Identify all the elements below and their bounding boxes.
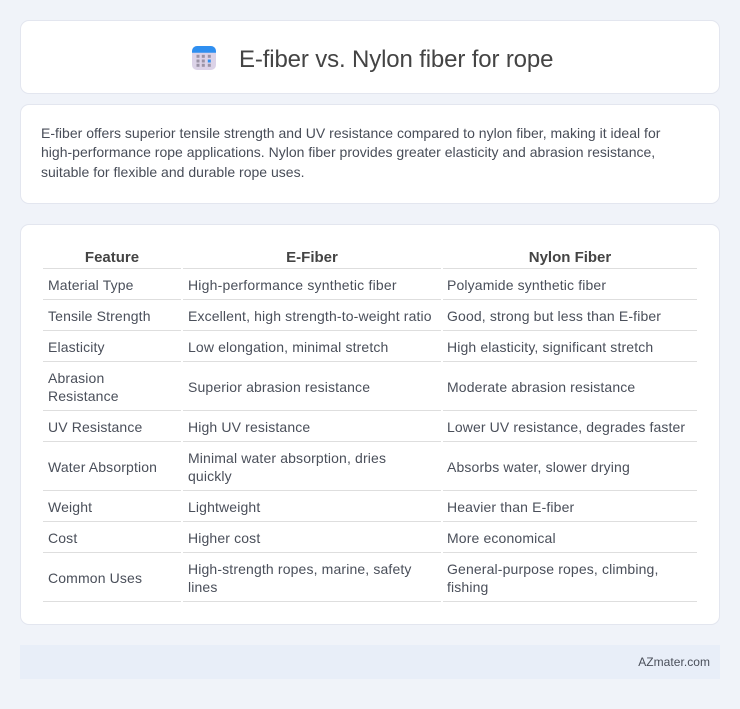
table rows: Moderate abrasion resistance xyxy=(447,379,635,395)
table rows: High elasticity, significant stretch xyxy=(447,339,653,355)
table rows: Low elongation, minimal stretch xyxy=(188,339,388,355)
title: E-fiber vs. Nylon fiber for rope xyxy=(239,46,553,73)
table rows: Resistance xyxy=(48,388,119,404)
summary text: suitable for flexible and durable rope uses. xyxy=(41,164,304,180)
table rows: Material Type xyxy=(48,277,134,293)
table rows: High-strength ropes, marine, safety xyxy=(188,561,412,577)
table rows: Water Absorption xyxy=(48,459,157,475)
table rows: High-performance synthetic fiber xyxy=(188,277,397,293)
table rows: Higher cost xyxy=(188,530,260,546)
table rows: UV Resistance xyxy=(48,419,142,435)
table rows: Elasticity xyxy=(48,339,105,355)
footer bar xyxy=(20,645,720,679)
footer credit: AZmater.com xyxy=(638,655,710,669)
table rows: Tensile Strength xyxy=(48,308,151,324)
table header: Feature xyxy=(85,249,139,266)
table rows: Polyamide synthetic fiber xyxy=(447,277,606,293)
panel: title card xyxy=(20,20,720,94)
table rows: Absorbs water, slower drying xyxy=(447,459,630,475)
table header: E-Fiber xyxy=(286,249,338,266)
table rows: Lightweight xyxy=(188,499,260,515)
table rows: fishing xyxy=(447,579,488,595)
table rows: Abrasion xyxy=(48,370,104,386)
summary text: high-performance rope applications. Nylon fiber provides greater elasticity and abrasion resistance, xyxy=(41,144,655,160)
table rows: Common Uses xyxy=(48,570,142,586)
table rows: Weight xyxy=(48,499,92,515)
table rows: High UV resistance xyxy=(188,419,310,435)
table rows: Heavier than E-fiber xyxy=(447,499,574,515)
table rows: Good, strong but less than E-fiber xyxy=(447,308,661,324)
table rows: Cost xyxy=(48,530,77,546)
table rows: lines xyxy=(188,579,218,595)
table rows: Minimal water absorption, dries xyxy=(188,450,386,466)
panel: comparison table xyxy=(20,224,720,625)
table header: Nylon Fiber xyxy=(529,249,611,266)
summary text xyxy=(41,125,660,180)
table header xyxy=(43,249,697,269)
table rows: Lower UV resistance, degrades faster xyxy=(447,419,685,435)
summary text: E-fiber offers superior tensile strength and UV resistance compared to nylon fiber, making it ideal for xyxy=(41,125,660,141)
table rows: quickly xyxy=(188,468,232,484)
table rows: General-purpose ropes, climbing, xyxy=(447,561,658,577)
table rows: Excellent, high strength-to-weight ratio xyxy=(188,308,432,324)
table rows: Superior abrasion resistance xyxy=(188,379,370,395)
panel: summary xyxy=(20,104,720,204)
table rows: More economical xyxy=(447,530,556,546)
icon: calendar xyxy=(192,46,216,70)
comparison table xyxy=(43,249,697,602)
